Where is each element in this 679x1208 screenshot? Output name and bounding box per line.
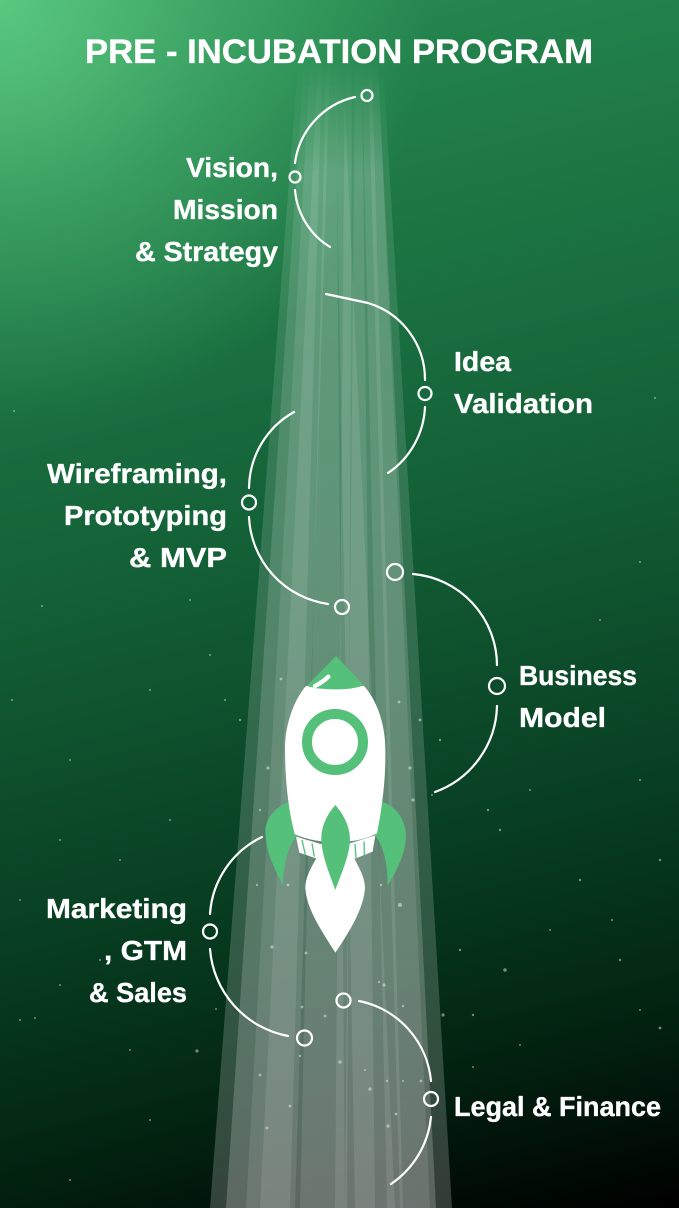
connector arc (295, 97, 355, 247)
stars (11, 397, 661, 1181)
label: Vision, (186, 152, 278, 183)
step: Marketing, GTM & Sales (46, 837, 312, 1046)
right fin (375, 801, 406, 886)
label: Mission (173, 194, 278, 225)
nose cone (307, 656, 364, 689)
body (285, 686, 385, 842)
step: Vision, Mission & Strategy (135, 90, 372, 267)
label: Prototyping (64, 500, 227, 531)
step: Idea Validation (326, 294, 593, 473)
connector arc (210, 837, 288, 1036)
engine ring (296, 835, 375, 859)
step: Legal & Finance (336, 994, 661, 1184)
marker dot (418, 387, 432, 400)
step: Business Model (387, 564, 637, 792)
connector arc (413, 574, 497, 792)
label (46, 893, 187, 1008)
label: Wireframing, (47, 458, 227, 489)
connector arc (359, 1001, 431, 1184)
label: & Sales (89, 977, 187, 1008)
label: & MVP (129, 542, 227, 573)
label: Model (519, 702, 606, 733)
label: , GTM (104, 935, 187, 966)
connector arc (249, 412, 328, 604)
label: Legal & Finance (454, 1091, 661, 1122)
marker dots (336, 994, 438, 1106)
label: Validation (454, 388, 593, 419)
label (47, 458, 227, 573)
label: Idea (454, 346, 511, 377)
marker dots (203, 924, 312, 1046)
flame (305, 857, 365, 953)
step: Wireframing, Prototyping & MVP (47, 412, 349, 614)
nose highlight (315, 677, 328, 686)
label (135, 152, 278, 267)
connector arc (326, 294, 425, 473)
label: Business (519, 660, 637, 691)
marker dots (387, 564, 505, 694)
title: PRE - INCUBATION PROGRAM (85, 33, 593, 71)
porthole (307, 714, 363, 770)
light beams (210, 65, 452, 1208)
left fin (265, 801, 297, 885)
label (454, 346, 593, 419)
label: & Strategy (135, 236, 278, 267)
rocket (265, 656, 406, 953)
label (519, 660, 637, 733)
label: Marketing (46, 893, 187, 924)
marker dots (242, 496, 349, 614)
marker dots (290, 90, 372, 182)
centre fin (321, 805, 350, 890)
